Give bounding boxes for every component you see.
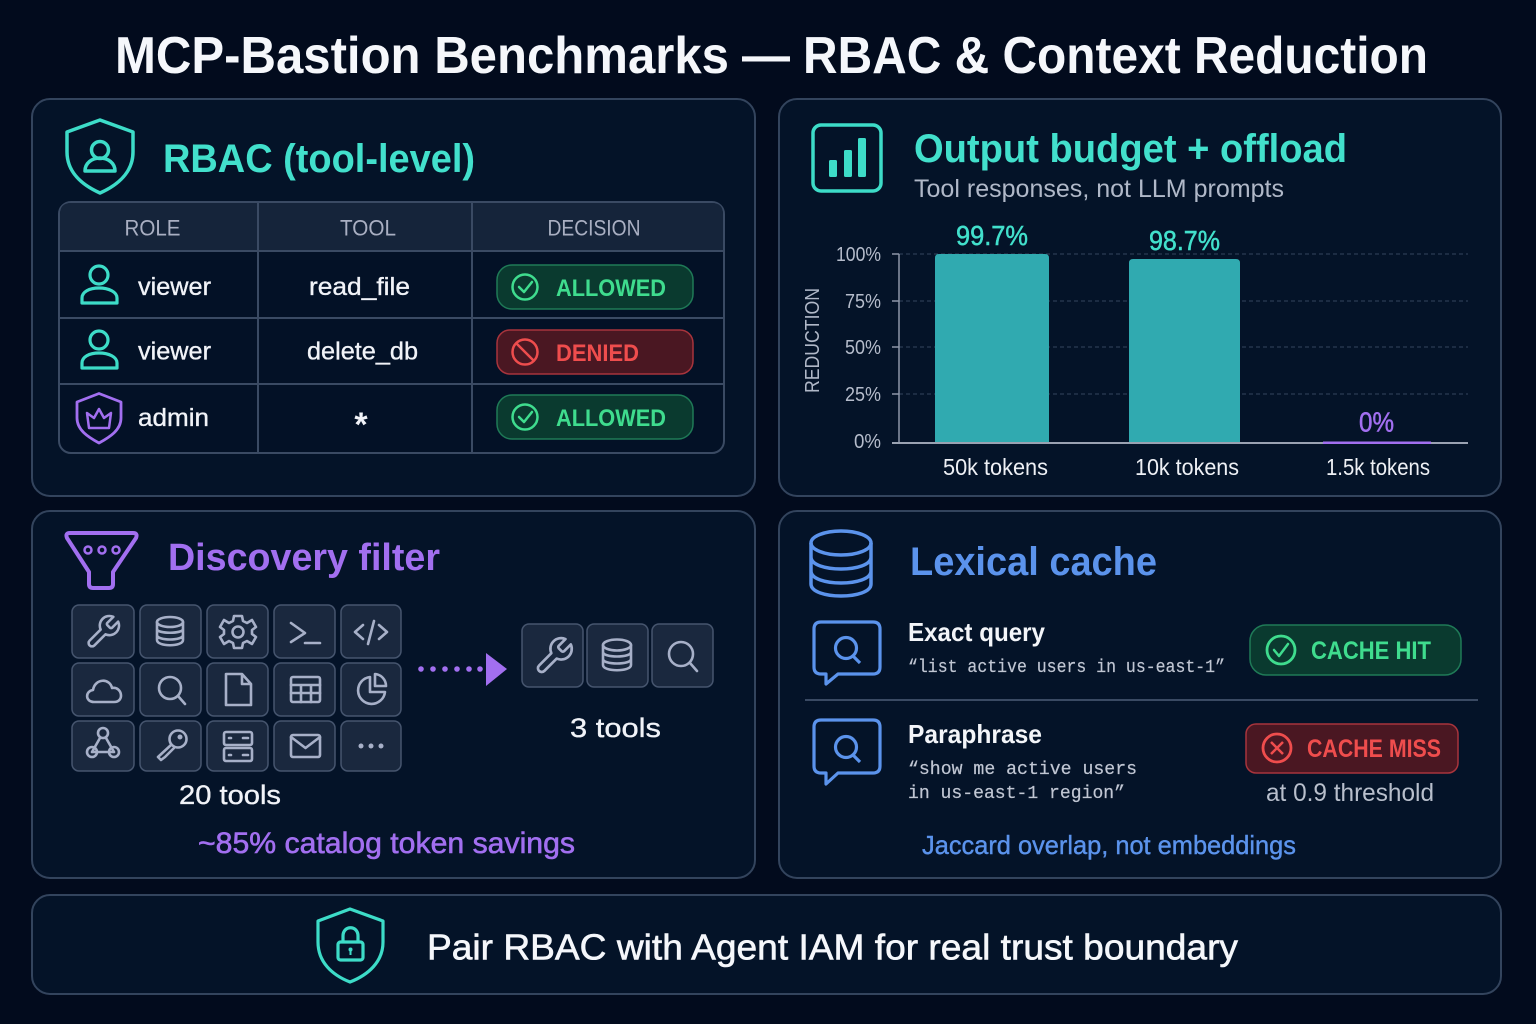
- row: viewer delete_db denied: delete_db: [307, 338, 418, 366]
- icon: search: [669, 642, 697, 671]
- badge: cache hit: CACHE HIT: [1311, 637, 1431, 665]
- row: admin wildcard allowed: [77, 394, 693, 444]
- badge: cache hit: [1250, 625, 1461, 675]
- table header: DECISION: [548, 216, 640, 240]
- row: viewer read_file allowed: read_file: [309, 273, 410, 301]
- icon: terminal: [291, 623, 320, 643]
- panel: Discovery filter: [32, 511, 755, 878]
- row: paraphrase: “show me active users: [908, 759, 1137, 780]
- icon: search: [159, 677, 185, 704]
- icon: server: [224, 732, 252, 761]
- row: admin wildcard allowed: admin: [138, 404, 209, 432]
- heading: discovery filter: Discovery filter: [168, 537, 440, 579]
- title: —: [742, 27, 790, 85]
- icon: funnel: [66, 533, 137, 588]
- row: paraphrase: Paraphrase: [908, 719, 1042, 749]
- icon: gear: [220, 616, 256, 648]
- row: paraphrase: in us-east-1 region”: [908, 783, 1125, 804]
- row: viewer read_file allowed: ALLOWED: [556, 275, 666, 302]
- row: viewer delete_db denied: viewer: [138, 338, 211, 366]
- icon: wrench: [538, 638, 572, 672]
- title: MCP-Bastion Benchmarks: [115, 27, 729, 85]
- category labels: 10k tokens: [1135, 454, 1239, 480]
- bar: 10k tokens: [1129, 259, 1240, 443]
- icon: cloud: [87, 681, 121, 702]
- heading: lexical cache: Lexical cache: [910, 540, 1157, 584]
- y axis labels: 25%: [845, 384, 881, 406]
- table: role decisions: [59, 202, 724, 453]
- y axis title: REDUCTION: [802, 288, 824, 393]
- icon: search bubble: [814, 622, 880, 684]
- y axis labels: [836, 244, 881, 453]
- row: admin wildcard allowed: *: [354, 406, 368, 444]
- bar: 50k tokens: [935, 254, 1049, 443]
- value labels: [956, 220, 1394, 438]
- icon: more dots: [358, 744, 384, 748]
- value labels: 98.7%: [1149, 225, 1220, 256]
- y axis labels: 75%: [845, 291, 881, 313]
- heading: RBAC: RBAC (tool-level): [163, 137, 475, 181]
- icon: wrench: [89, 616, 119, 646]
- icon: mail: [291, 735, 320, 757]
- panel: Output budget + offload: [779, 99, 1501, 496]
- panel: footer takeaway: [32, 895, 1501, 994]
- value labels: 0%: [1359, 406, 1394, 438]
- bar: 1.5k tokens: [1323, 442, 1431, 444]
- arrow: filter result: [418, 653, 507, 686]
- icon: webhook: [87, 728, 119, 757]
- category labels: 50k tokens: [943, 454, 1048, 480]
- icon: bar chart: [813, 125, 881, 191]
- table header: ROLE: [124, 216, 180, 240]
- row: viewer read_file allowed: [82, 265, 693, 309]
- row: viewer delete_db denied: [82, 330, 693, 374]
- row: admin wildcard allowed: ALLOWED: [556, 405, 666, 432]
- subheading: Tool responses, not LLM prompts: [914, 175, 1284, 203]
- badge: cache miss: [1246, 724, 1458, 773]
- row: exact query: “list active users in us-east-1”: [908, 657, 1225, 678]
- text: takeaway: Pair RBAC with Agent IAM for real trust boundary: [427, 926, 1238, 968]
- label: 20 tools: 20 tools: [179, 780, 281, 810]
- label: threshold: at 0.9 threshold: [1266, 779, 1434, 807]
- label: 3 tools: 3 tools: [570, 713, 661, 743]
- row: viewer read_file allowed: viewer: [138, 273, 211, 301]
- badge: cache miss: CACHE MISS: [1307, 735, 1441, 763]
- tool grid: 20 tools: [72, 605, 401, 771]
- bar chart: reduction: [802, 220, 1468, 480]
- panel: Lexical cache: [779, 511, 1501, 878]
- category labels: [943, 454, 1430, 480]
- table header: [124, 216, 640, 240]
- icon: database: [603, 640, 631, 670]
- icon: key: [158, 730, 186, 760]
- panel: RBAC (tool-level): [32, 99, 755, 496]
- y axis labels: 50%: [845, 337, 881, 359]
- title: [115, 27, 1428, 85]
- icon: search bubble: [814, 720, 880, 784]
- tool grid: 3 tools: [522, 624, 713, 687]
- heading: output budget: Output budget + offload: [914, 127, 1347, 171]
- row: exact query: Exact query: [908, 617, 1046, 647]
- icon: code: [355, 621, 387, 644]
- icon: table: [291, 677, 320, 702]
- value labels: 99.7%: [956, 220, 1028, 251]
- icon: shield with user: [67, 120, 133, 193]
- row: paraphrase: [814, 719, 1458, 807]
- row: viewer delete_db denied: DENIED: [556, 340, 639, 367]
- icon: database: [811, 531, 871, 596]
- callout: catalog token savings: ~85% catalog token savings: [198, 827, 575, 860]
- y axis labels: 100%: [836, 244, 881, 266]
- callout: jaccard overlap: Jaccard overlap, not embeddings: [922, 830, 1296, 860]
- icon: database: [157, 617, 183, 645]
- category labels: 1.5k tokens: [1326, 454, 1430, 480]
- y axis labels: 0%: [854, 431, 881, 453]
- icon: shield with lock: [318, 909, 383, 982]
- title: RBAC & Context Reduction: [803, 27, 1428, 85]
- icon: pie chart: [358, 674, 386, 704]
- table header: TOOL: [340, 216, 396, 240]
- icon: file: [226, 674, 251, 705]
- row: exact query: [814, 617, 1461, 684]
